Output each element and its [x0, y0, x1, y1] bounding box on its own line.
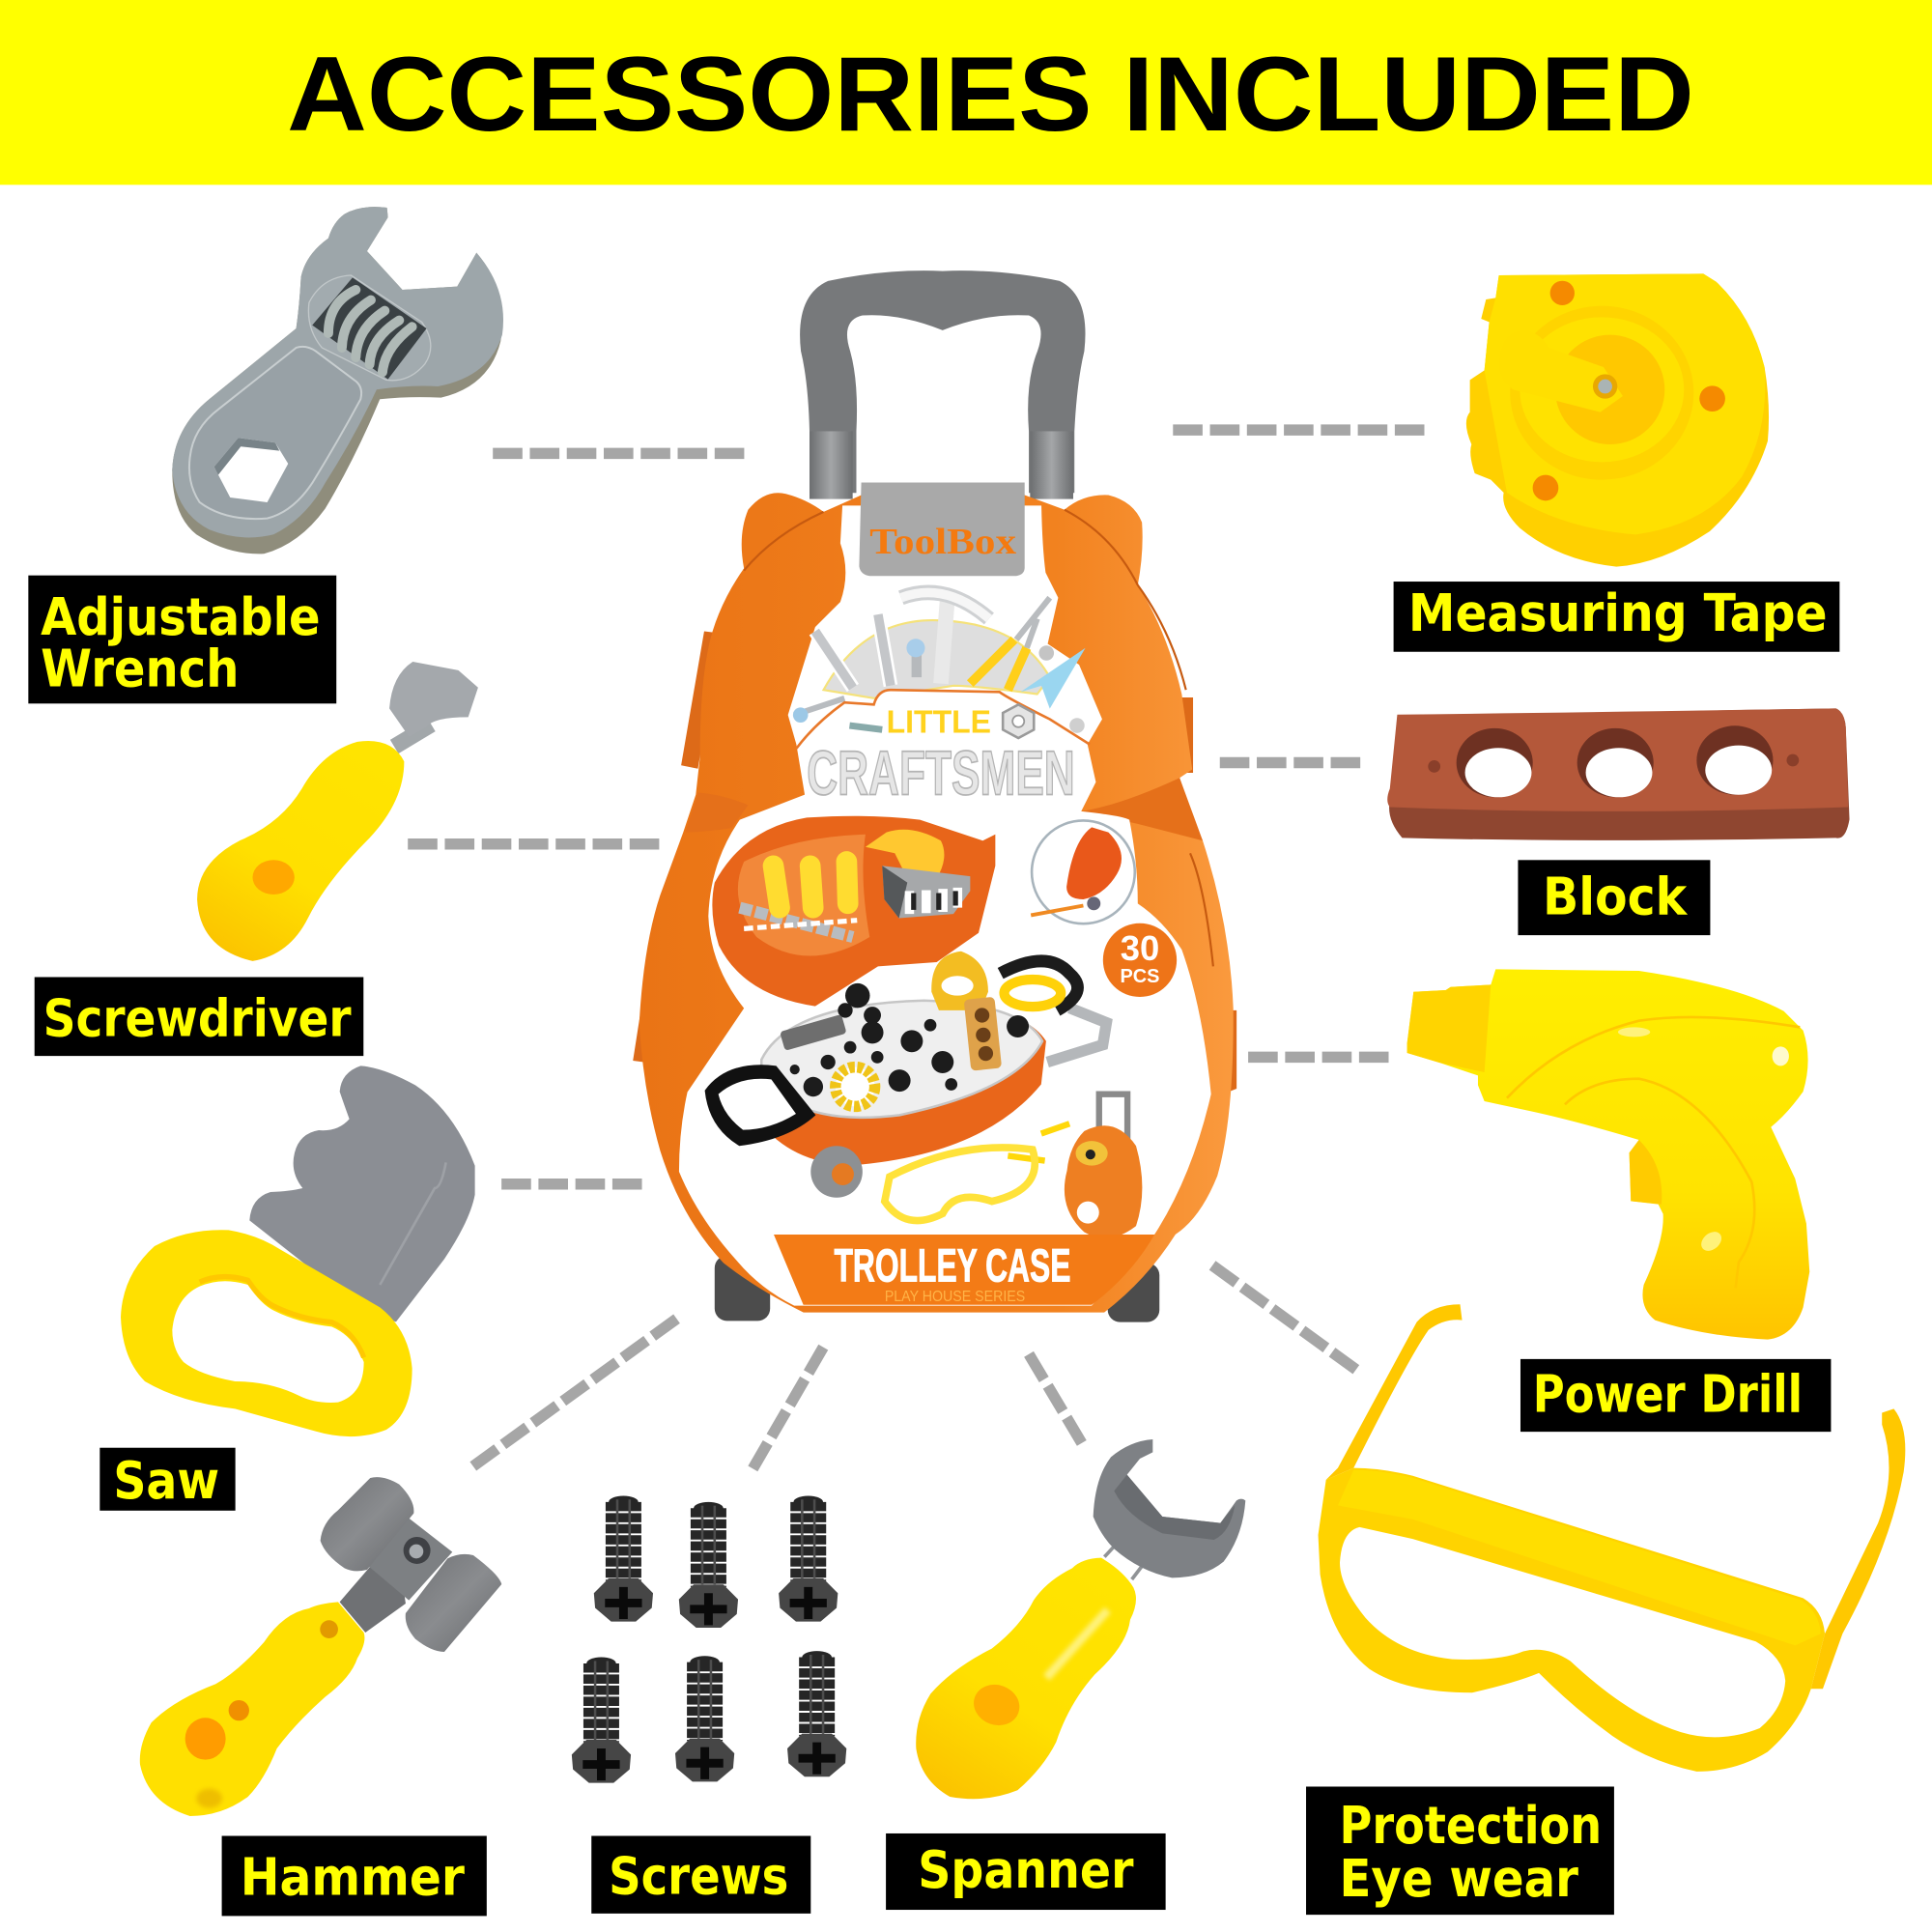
inset: open case upper half: [712, 816, 995, 1007]
connector: power drill: [1248, 1053, 1390, 1062]
inset wheel: [810, 1146, 863, 1198]
label: saw: Saw: [113, 1450, 219, 1511]
inset detail circle: [1031, 820, 1135, 923]
inset goggles: [885, 1148, 1035, 1221]
30 pcs badge: PCS: [1120, 966, 1159, 987]
mini tape measure: [931, 952, 988, 1010]
30 pcs badge: [1103, 923, 1177, 997]
banner title: TROLLEY CASE: [835, 1240, 1070, 1293]
label: spanner: [886, 1833, 1166, 1910]
icon: screws: [572, 1495, 846, 1783]
label: hammer: Hammer: [241, 1847, 465, 1908]
brand name: ToolBox: [869, 522, 1016, 562]
banner subtitle: PLAY HOUSE SERIES: [885, 1289, 1025, 1305]
label: protection eye wear: Eye wear: [1339, 1848, 1578, 1909]
mini tube: [1047, 1008, 1106, 1062]
logo tool illustration: [793, 592, 1090, 749]
connector: hammer: [473, 1318, 679, 1466]
wheels: [715, 1256, 1159, 1322]
connector: eye wear: [1212, 1265, 1360, 1373]
connector: saw: [501, 1179, 642, 1188]
case shell: [639, 493, 1234, 1313]
30 pcs badge: 30: [1121, 928, 1159, 968]
label: adjustable wrench: Wrench: [41, 638, 239, 698]
central product: trolley case: [633, 270, 1236, 1322]
label: screws: Screws: [609, 1845, 788, 1906]
black case handle: [705, 1065, 815, 1146]
trolley handle: [800, 270, 1086, 499]
white label panel: [679, 505, 1211, 1306]
label: protection eye wear: Protection: [1339, 1795, 1602, 1856]
inset mini trolley: [1065, 1094, 1142, 1238]
label: measuring tape: Measuring Tape: [1408, 582, 1828, 643]
connector: spanner: [1029, 1354, 1083, 1445]
side tabs: [633, 631, 1236, 1096]
case body and label, drawn in crop coordinates: [633, 482, 1236, 1313]
icon: adjustable wrench: [172, 207, 503, 554]
label: block: Block: [1543, 866, 1688, 926]
label: block: [1518, 860, 1710, 935]
connector: measuring tape: [1173, 426, 1424, 435]
icon: protection eye wear: [1319, 1304, 1905, 1772]
icon: block: [1387, 708, 1850, 840]
label: adjustable wrench: Adjustable: [41, 586, 321, 647]
logo word: little: LITTLE: [887, 703, 991, 739]
label: adjustable wrench: [28, 576, 336, 703]
connector: screwdriver: [408, 839, 661, 848]
icon: screwdriver: [197, 662, 478, 961]
inset: open case lower half: [705, 952, 1106, 1198]
icon: power drill: [1407, 969, 1809, 1340]
icon: saw: [121, 1065, 475, 1436]
icon: measuring tape: [1466, 273, 1769, 567]
connector: wrench: [493, 449, 744, 458]
label: screwdriver: Screwdriver: [43, 988, 352, 1049]
icon: hammer: [140, 1477, 501, 1816]
mini block: [964, 997, 1002, 1071]
icon: spanner: [916, 1439, 1245, 1799]
label: spanner: Spanner: [918, 1839, 1134, 1900]
connector: block: [1220, 758, 1361, 767]
header banner: [0, 0, 1932, 185]
waist bands: [685, 778, 1203, 840]
bottom banner: [774, 1235, 1154, 1305]
ears and edge lines: [744, 510, 1213, 966]
connector: screws: [753, 1346, 824, 1468]
gear: [836, 1067, 875, 1106]
title: ACCESSORIES INCLUDED: [287, 36, 1694, 154]
label: power drill: Power Drill: [1533, 1364, 1803, 1425]
logo word: craftsmen: CRAFTSMEN: [807, 738, 1075, 809]
label: protection eye wear: [1306, 1786, 1614, 1915]
tag with brand: [859, 482, 1025, 576]
